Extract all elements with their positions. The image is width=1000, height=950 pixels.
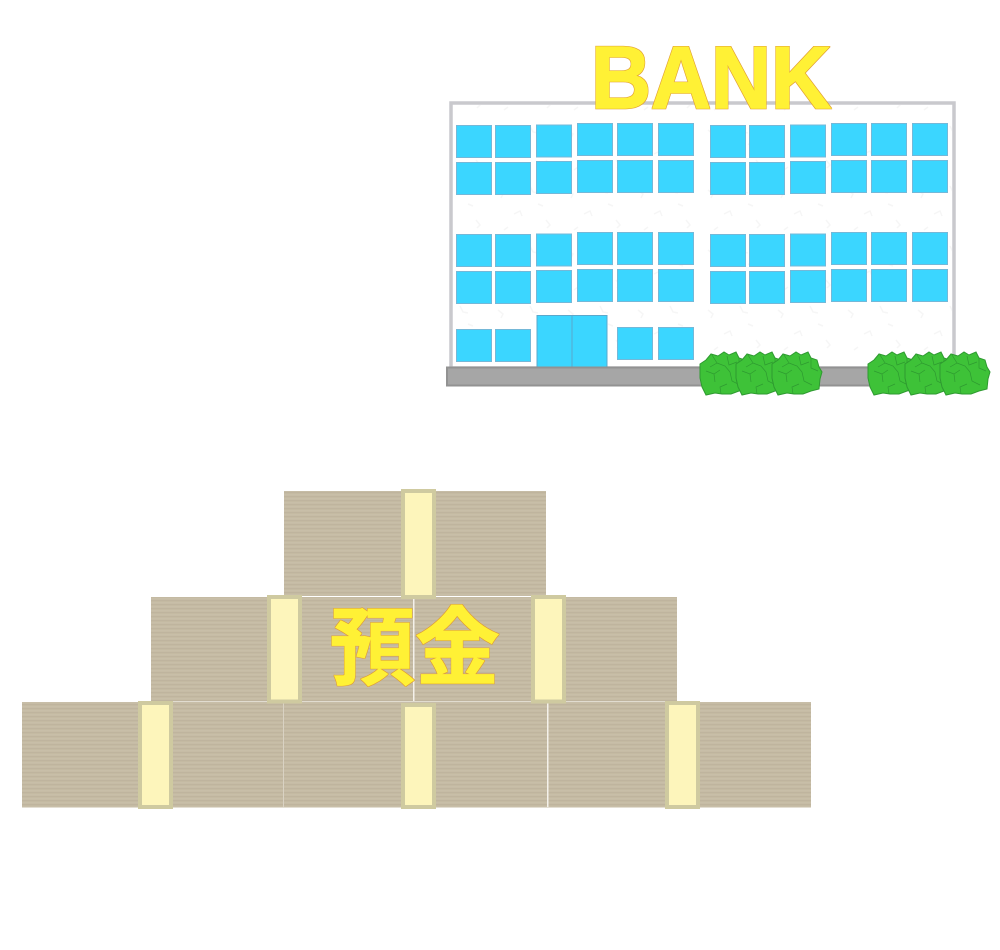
middle row stack [151, 597, 677, 702]
building facade [451, 103, 954, 368]
bottom row stack [22, 702, 811, 808]
foundation [447, 368, 877, 386]
shrubs left [700, 352, 822, 395]
paper bands [140, 491, 698, 807]
top row stack [284, 491, 546, 596]
deposit label: 預金 [330, 602, 500, 697]
shrubs right [868, 352, 990, 395]
entrance door [537, 316, 607, 368]
illustration: stacks of banknotes [22, 491, 811, 808]
illustration: bank building [447, 28, 990, 395]
windows [456, 124, 948, 362]
BANK sign: BANK [591, 28, 831, 127]
